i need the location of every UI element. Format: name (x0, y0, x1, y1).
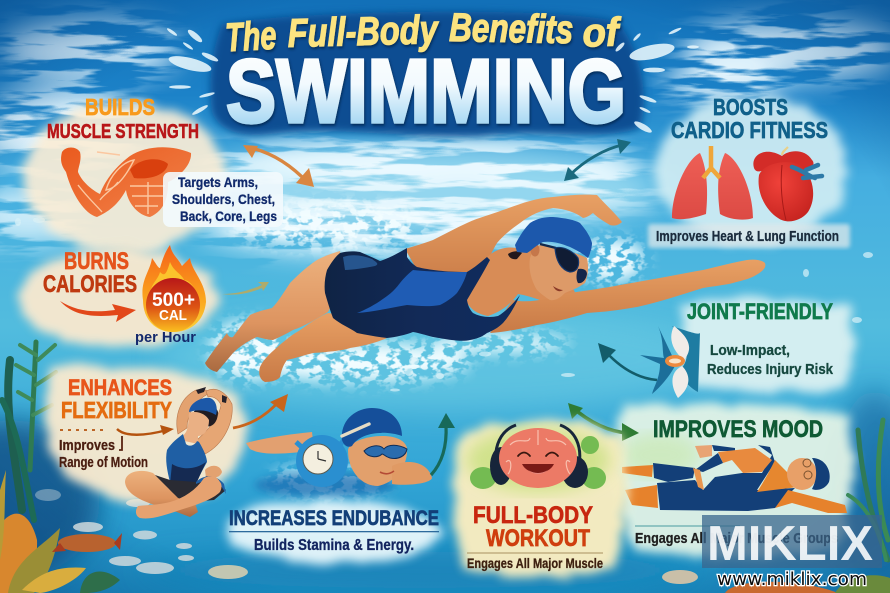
heading: BOOSTS (713, 94, 788, 120)
arrow: joint to swimmer (598, 343, 657, 380)
face and neck (180, 412, 209, 444)
divider and caption: Builds Stamina & Energy. (254, 537, 414, 554)
lower arm (775, 490, 847, 513)
heading (473, 502, 593, 552)
watermark: MIKLIX: www.miklix.com (717, 569, 867, 590)
panel: increases endurance (224, 408, 440, 564)
far leg (259, 313, 387, 382)
heading (61, 375, 172, 423)
panel: muscle strength (23, 94, 283, 254)
chest (757, 460, 798, 492)
panel: full-body workout (453, 421, 626, 576)
arrow and dotted line (60, 425, 174, 450)
caption band: Improves Heart & Lung Function (656, 229, 839, 245)
illustration: swimmer on back (622, 445, 847, 513)
torso (166, 434, 207, 482)
icon: heart (753, 147, 822, 221)
arrow: endurance upward (431, 413, 455, 475)
text backdrop (224, 500, 440, 564)
scenery: left seaweed and fish (0, 342, 248, 593)
back and upper arm (405, 195, 622, 290)
heading: WORKOUT (486, 525, 590, 552)
heading (47, 94, 199, 143)
text card: targets: Targets Arms, (178, 174, 258, 190)
raised hand (695, 445, 712, 458)
panel: joint-friendly (640, 299, 852, 398)
goggles (540, 244, 587, 283)
heading: CARDIO FITNESS (671, 117, 828, 143)
lower arm (490, 260, 765, 333)
caption: Engages All Major Muscle Groups (635, 530, 838, 547)
icon: flexed muscular arm (61, 147, 191, 217)
arm (718, 448, 772, 473)
near leg (205, 251, 345, 372)
caption: Low-Impact, (710, 342, 790, 359)
caption (707, 342, 834, 378)
heading (43, 248, 137, 298)
heading (671, 94, 828, 143)
panel: enhances flexibility (45, 365, 246, 518)
panel backdrop (23, 102, 227, 254)
caption: Range of Motion (59, 454, 148, 471)
title line: The Full-Body Benefits of: Benefits (449, 6, 574, 52)
caption: Reduces Injury Risk (707, 361, 834, 378)
panel: improves mood (616, 403, 853, 558)
swimsuit (325, 248, 520, 341)
icon: joint (640, 326, 700, 398)
foam streaks (0, 20, 890, 255)
icon: blue clock (296, 435, 348, 487)
crossed legs (125, 471, 198, 517)
legs (622, 465, 658, 508)
text card: targets (163, 172, 283, 227)
heading: BUILDS (85, 94, 155, 120)
arrow: flexibility to swimmer (233, 394, 288, 428)
scenery: right seaweed and fish (662, 420, 890, 593)
panel backdrop (656, 95, 848, 245)
spray around swimmer (210, 203, 646, 496)
resting hand (205, 466, 222, 478)
face (529, 245, 588, 300)
heading: MUSCLE STRENGTH (47, 121, 199, 143)
hair (508, 251, 522, 259)
heading: INCREASES ENDUBANCE (229, 507, 439, 530)
water droplets around title (166, 27, 699, 135)
heading: IMPROVES MOOD (653, 416, 823, 443)
swim cap (515, 217, 592, 258)
divider and caption: Engages All Major Muscle (467, 555, 603, 571)
bubbles (15, 217, 873, 392)
icon: flame badge: CAL (159, 307, 187, 324)
heading: ENHANCES (68, 375, 172, 400)
caption (59, 437, 148, 471)
caption: per Hour (135, 329, 196, 346)
icon: flame badge (142, 245, 206, 332)
title line: The Full-Body Benefits of (224, 6, 623, 60)
heading: JOINT-FRIENDLY (687, 299, 833, 324)
heading: FULL-BODY (473, 502, 593, 529)
green glow (620, 433, 700, 477)
watermark: MIKLIX: MIKLIX (707, 517, 873, 571)
panel backdrop (681, 299, 852, 392)
heading: FLEXIBILITY (61, 397, 172, 423)
arrow: mood double arrow (568, 403, 639, 441)
panel backdrop (45, 365, 246, 504)
icon: smiling brain with headphones (470, 425, 606, 489)
panel backdrop (616, 403, 853, 558)
illustration: swimmer with clock (246, 408, 432, 497)
text card: targets: Back, Core, Legs (180, 208, 277, 224)
chest and neck (466, 245, 575, 316)
icon: flame badge: 500+ (152, 290, 195, 311)
icon: lungs (672, 146, 753, 220)
caption: Improves (59, 437, 115, 454)
arrow: cardio double arrow (564, 139, 631, 181)
green glow (466, 428, 610, 492)
arrow (60, 301, 136, 322)
arrow: faint yellow (222, 282, 269, 295)
title line: The Full-Body Benefits of: The (224, 14, 277, 60)
raised arms (177, 390, 208, 434)
arrow: muscle double arrow (243, 145, 314, 187)
title backing: deep water splash (210, 12, 644, 136)
watermark: MIKLIX (702, 515, 882, 590)
caption band (648, 224, 850, 248)
head (787, 458, 817, 490)
title (166, 6, 699, 142)
text card: targets: Shoulders, Chest, (172, 191, 275, 207)
hair and cap (192, 405, 218, 426)
panel: boosts cardio fitness (648, 94, 850, 248)
heading: BURNS (64, 248, 129, 275)
illustration: seated stretching swimmer (125, 387, 232, 518)
title line: The Full-Body Benefits of: of (582, 10, 623, 56)
panel backdrop (453, 421, 626, 576)
heading: CALORIES (43, 271, 137, 298)
body suit (657, 445, 795, 511)
swimmer: main figure (205, 195, 765, 382)
title line: The Full-Body Benefits of: Full-Body (287, 8, 440, 56)
shorts (152, 474, 226, 503)
title word: SWIMMING: SWIMMING (226, 42, 626, 142)
panel: burns calories (18, 245, 218, 348)
panel backdrop (18, 248, 218, 348)
